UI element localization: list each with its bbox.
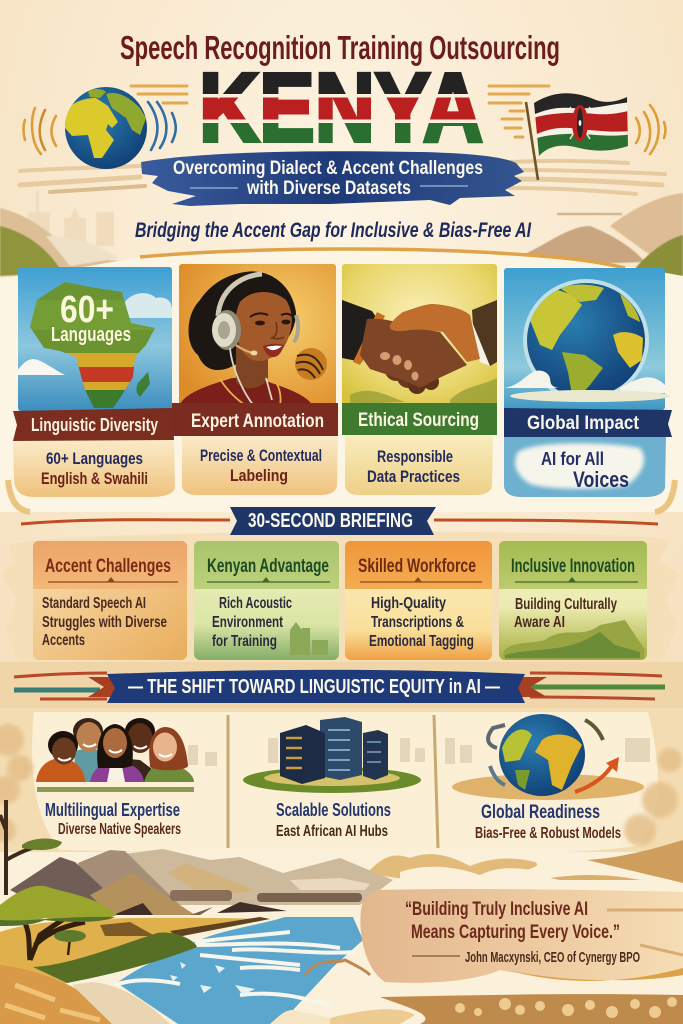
panel: accent challenges [33,541,187,660]
body text: Bias-Free & Robust Models [475,825,621,842]
card text: Precise & Contextual [200,446,322,465]
panel: ethical sourcing [342,264,497,495]
ribbon: Linguistic Diversity [31,415,158,435]
card text: 60+ Languages [46,449,143,468]
subtitle banner [141,151,524,206]
image: group of people [36,718,194,782]
gold curve under top cards [8,480,675,512]
card text: English & Swahili [41,469,148,488]
decorative landscape: upper left [0,190,140,276]
decorative landscape: upper right [525,193,683,276]
card text: AI for All [541,449,604,469]
body text: Building Culturally [515,596,617,613]
panel: kenyan advantage [194,541,339,660]
heading: 30-second briefing [230,507,436,535]
golden arc above cards [140,249,625,268]
image: earth globe [504,268,670,410]
card text [41,449,148,488]
heading: Global Readiness [481,802,600,823]
image: server racks on island [243,717,421,793]
band behind briefing cards [2,532,680,665]
ribbon [342,403,497,435]
card text [541,449,629,492]
green bank [33,932,197,983]
lower parchment [345,433,493,495]
forest illustration [503,620,645,659]
ribbon: Ethical Sourcing [358,410,479,431]
quote text: “Building Truly Inclusive AI [405,899,588,920]
ribbon [172,403,338,436]
body text: Standard Speech AI [42,595,146,612]
body text: Transcriptions & [371,614,464,631]
body text [212,595,292,650]
ribbon: Global Impact [527,413,640,434]
brush strokes behind subtitle banner [20,161,665,194]
body text [514,596,617,631]
panel: inclusive innovation [499,541,647,660]
cream panel behind top cards [0,249,683,512]
body text: Diverse Native Speakers [58,821,181,838]
body text: High-Quality [371,595,446,612]
heading: Accent Challenges [45,556,171,577]
panel: skilled workforce [345,541,492,660]
hill foreground [0,965,112,1024]
subtitle text: Overcoming Dialect & Accent Challenges [173,157,483,179]
panel: linguistic diversity [10,267,175,497]
lower parchment [182,434,338,495]
card text: Voices [573,467,629,492]
ribbon [504,408,672,437]
card text: Data Practices [367,467,460,486]
card text: Responsible [377,447,453,466]
kenya wordmark: KENYA [199,53,483,162]
river [117,917,363,1024]
plains [0,918,270,985]
far ranges [60,849,393,905]
card text [200,446,322,485]
icon: globe with sound waves [24,86,187,169]
landscape with mountains, river and trees [0,800,683,1024]
body text: Aware AI [514,614,565,631]
heading: Scalable Solutions [276,800,391,820]
tagline: Bridging the Accent Gap for Inclusive & Bias-Free AI [135,219,532,242]
image: africa map: 60+ [60,289,114,331]
heading: shift banner: — THE SHIFT TOWARD LINGUISTIC EQUITY in AI — [128,676,500,698]
card text: Labeling [230,466,288,485]
body text: for Training [212,633,277,650]
image: woman with headset [179,264,336,406]
divider lines beside briefing [21,520,658,524]
image: globe with arrows [452,714,644,800]
body text: Emotional Tagging [369,633,474,650]
clouds and foliage at right [370,840,683,886]
bottom parchment background [0,708,683,1024]
card text [367,447,460,486]
heading: shift banner [88,670,547,703]
panel: expert annotation [172,264,338,495]
image: africa map [10,267,172,411]
panel: global impact [504,268,672,497]
body text: Environment [212,614,283,631]
image: handshake [342,264,497,406]
panel: scalable solutions [243,717,421,840]
shift banner side lines [14,673,665,699]
body text: Accents [42,632,85,649]
heading: 30-second briefing: 30-SECOND BRIEFING [248,510,413,532]
dividers [228,715,438,848]
heading: Kenyan Advantage [207,556,329,577]
subtitle text: with Diverse Datasets [246,177,411,199]
mountains [78,850,190,915]
panel: multilingual expertise [36,718,194,838]
bottom speckled ground [330,994,683,1024]
ribbon [13,408,174,441]
subtitle text [173,157,483,199]
lower parchment [13,438,175,497]
skyline illustration [290,622,328,655]
quote text [405,899,620,943]
panel: global readiness [452,714,644,842]
green bar [37,787,194,792]
heading: Skilled Workforce [358,556,476,577]
image: africa map: Languages [51,324,131,346]
body text: Struggles with Diverse [42,614,167,631]
lower watercolor [504,436,666,497]
acacia trees [20,915,85,960]
body text: East African AI Hubs [276,823,388,840]
body text: Rich Acoustic [219,595,292,612]
ribbon: Expert Annotation [191,411,324,432]
body text [369,595,474,650]
panel: quote [305,889,683,983]
lower band [0,662,683,712]
body text [42,595,167,649]
skyline [188,738,650,766]
icon: kenyan flag with sound waves [489,85,666,180]
heading: Multilingual Expertise [45,800,180,820]
